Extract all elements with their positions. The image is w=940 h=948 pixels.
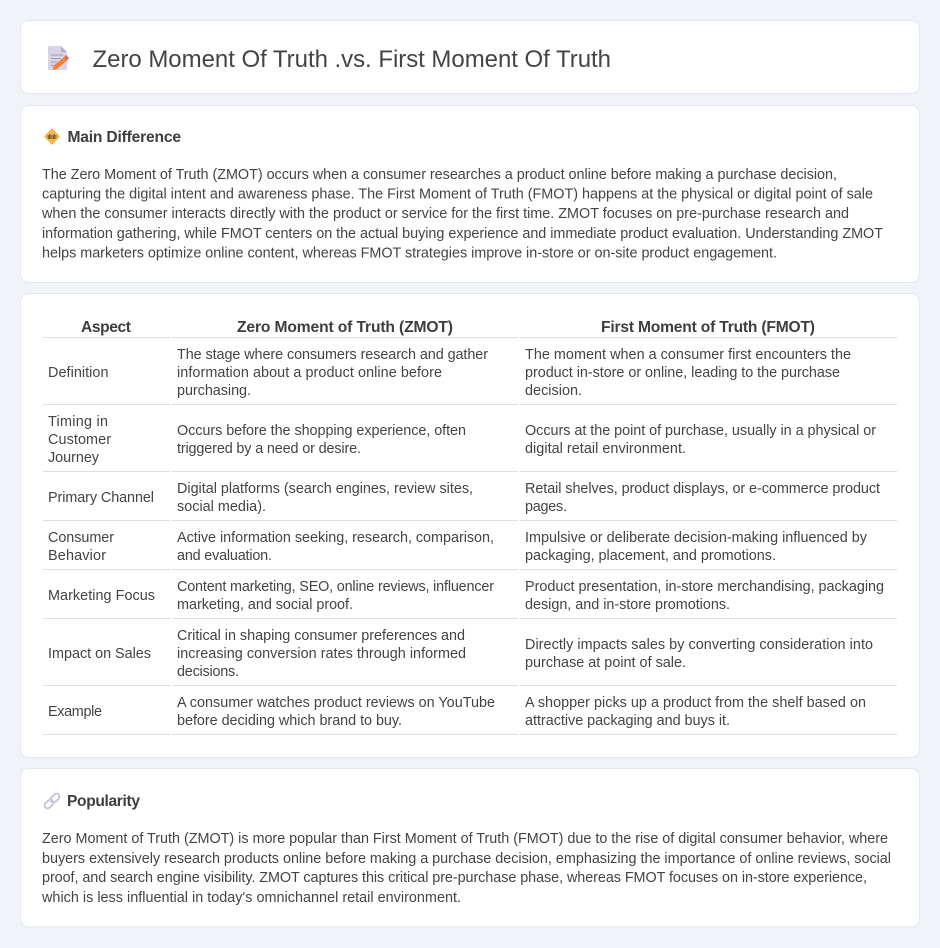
text block: main difference: capturing the digital intent and awareness phase. The First Moment of Truth (FMOT) happens at the physical or digital point of sale: [42, 187, 873, 203]
row: definition: information about a product online before: [177, 365, 442, 381]
row: impact on sales: [48, 628, 873, 680]
table header: [81, 319, 815, 336]
row: definition: Definition: [48, 365, 108, 381]
row: consumer behavior: Consumer: [48, 530, 114, 546]
row: example: [48, 695, 866, 729]
row: definition: The moment when a consumer first encounters the: [525, 347, 851, 363]
text block: main difference: helps marketers optimize online content, whereas FMOT strategies improve in-store or on-site product engagement.: [42, 245, 777, 261]
row: marketing focus: Marketing Focus: [48, 588, 155, 604]
row: example: attractive packaging and buys it.: [525, 713, 730, 729]
panel: main difference: [20, 106, 920, 282]
text block: main difference: information gathering, while FMOT centers on the actual buying experience and immediate product evaluation. Understanding ZMOT: [42, 226, 883, 242]
row: primary channel: Retail shelves, product displays, or e-commerce product: [525, 481, 880, 497]
text block: main difference: [41, 167, 883, 261]
row: timing in customer journey: Timing in: [48, 414, 108, 430]
row: primary channel: [48, 481, 880, 515]
table header: Aspect: [81, 319, 131, 336]
row: consumer behavior: Behavior: [48, 548, 106, 564]
text block: popularity: Zero Moment of Truth (ZMOT) is more popular than First Moment of Truth (FMOT) due to the rise of digital consumer behavior, where: [42, 831, 888, 847]
row: consumer behavior: Active information seeking, research, comparison,: [177, 530, 494, 546]
row: consumer behavior: Impulsive or deliberate decision-making influenced by: [525, 530, 868, 546]
row: consumer behavior: [48, 530, 868, 564]
row: marketing focus: marketing, and social proof.: [177, 597, 353, 613]
row: primary channel: Digital platforms (search engines, review sites,: [177, 481, 473, 497]
row: example: A shopper picks up a product from the shelf based on: [525, 695, 866, 711]
row: marketing focus: Product presentation, in-store merchandising, packaging: [525, 579, 884, 595]
icon: document with pencil: [43, 0, 69, 70]
row: primary channel: pages.: [525, 499, 567, 515]
row: timing in customer journey: Occurs before the shopping experience, often: [177, 423, 466, 439]
table header: First Moment of Truth (FMOT): [601, 319, 815, 336]
row: consumer behavior: and evaluation.: [177, 548, 272, 564]
row: marketing focus: Content marketing, SEO, online reviews, influencer: [177, 579, 494, 595]
row: primary channel: Primary Channel: [48, 490, 154, 506]
text block: popularity: which is less influential in today's omnichannel retail environment.: [41, 890, 461, 906]
row: impact on sales: purchase at point of sale.: [525, 655, 686, 671]
text block: popularity: [41, 831, 891, 906]
text block: popularity: proof, and search engine visibility. ZMOT captures this critical pre-purchase phase, whereas FMOT focuses on in-store experience,: [42, 870, 867, 886]
row: marketing focus: design, and in-store promotions.: [525, 597, 730, 613]
row: timing in customer journey: [48, 414, 876, 466]
row: marketing focus: [48, 579, 884, 613]
text block: main difference: The Zero Moment of Truth (ZMOT) occurs when a consumer researches a product online before making a purchase decision,: [42, 167, 837, 183]
row: primary channel: social media).: [177, 499, 266, 515]
row: impact on sales: Impact on Sales: [48, 646, 151, 662]
row: definition: purchasing.: [177, 383, 251, 399]
row: timing in customer journey: Journey: [48, 450, 100, 466]
row: timing in customer journey: digital retail environment.: [525, 441, 686, 457]
panel: comparison table: [20, 294, 920, 758]
row: consumer behavior: packaging, placement, and promotions.: [525, 548, 776, 564]
table header: Zero Moment of Truth (ZMOT): [237, 319, 453, 336]
icon: chain link: [43, 792, 61, 810]
row: definition: The stage where consumers research and gather: [177, 347, 488, 363]
heading: main difference: Main Difference: [68, 129, 181, 146]
row: timing in customer journey: Customer: [48, 432, 111, 448]
row: definition: [48, 347, 851, 399]
row: impact on sales: Critical in shaping consumer preferences and: [177, 628, 465, 644]
row: example: Example: [48, 704, 102, 720]
row: timing in customer journey: Occurs at the point of purchase, usually in a physical or: [525, 423, 876, 439]
icon: warning diamond: [44, 128, 60, 145]
row: impact on sales: increasing conversion rates through informed: [177, 646, 466, 662]
text block: popularity: buyers extensively research products online before making a purchase decision, emphasizing the importance of online reviews, social: [42, 851, 891, 867]
row: definition: decision.: [525, 383, 582, 399]
row: example: before deciding which brand to buy.: [177, 713, 402, 729]
row: impact on sales: decisions.: [177, 664, 239, 680]
row: timing in customer journey: triggered by a need or desire.: [177, 441, 361, 457]
panel: popularity: [20, 768, 920, 927]
panel: title: [20, 0, 920, 94]
row: example: A consumer watches product reviews on YouTube: [177, 695, 495, 711]
row: impact on sales: Directly impacts sales by converting consideration into: [525, 637, 873, 653]
heading: popularity: Popularity: [67, 793, 140, 810]
row: definition: product in-store or online, leading to the purchase: [525, 365, 840, 381]
text block: main difference: when the consumer interacts directly with the product or service for the first time. ZMOT focuses on pre-purchase research and: [41, 206, 849, 222]
title text: Zero Moment Of Truth .vs. First Moment Of Truth: [92, 46, 611, 73]
